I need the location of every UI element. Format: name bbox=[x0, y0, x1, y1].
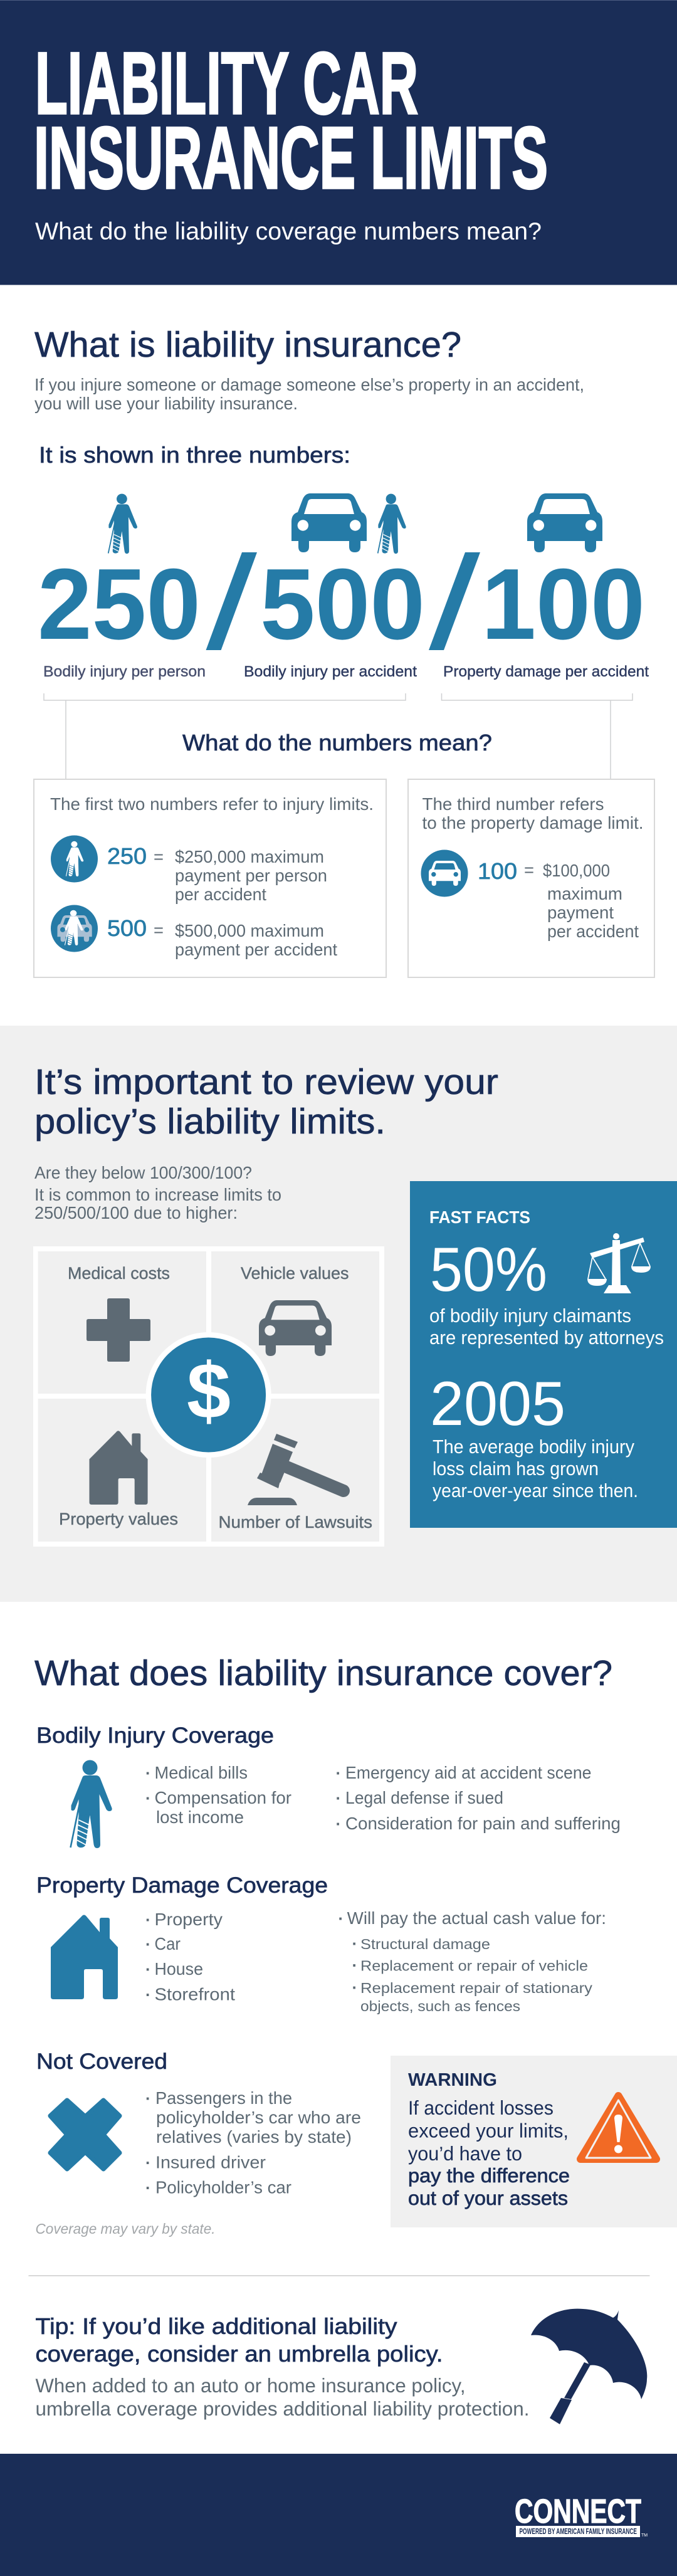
heading: review limits: policy’s liability limits. bbox=[34, 1101, 386, 1142]
list: property types: · bbox=[145, 1935, 151, 1953]
big numbers 250/500/100: 500 bbox=[260, 548, 425, 661]
stat 50% description: are represented by attorneys bbox=[429, 1327, 664, 1348]
panel: injury limits: The first two numbers refer to injury limits. bbox=[50, 794, 374, 814]
icon: person and car in circle bbox=[51, 905, 98, 952]
panel: property damage limit: to the property damage limit. bbox=[422, 813, 643, 833]
list: actual cash value: · bbox=[352, 1956, 357, 1975]
icon: X mark bbox=[50, 2100, 120, 2169]
100 explanation bbox=[478, 858, 639, 941]
tip text: umbrella coverage provides additional liability protection. bbox=[35, 2397, 529, 2420]
warning text: If accident losses bbox=[408, 2096, 554, 2119]
review paragraph bbox=[34, 1163, 281, 1222]
list: bodily injury right: Consideration for pain and suffering bbox=[345, 1814, 621, 1833]
icon: vehicle bbox=[259, 1300, 332, 1356]
list: bodily injury left: · bbox=[145, 1789, 151, 1807]
warning text: exceed your limits, bbox=[408, 2119, 569, 2142]
list: bodily injury right: Legal defense if sued bbox=[345, 1788, 503, 1807]
icon: medical cross bbox=[87, 1298, 150, 1362]
review paragraph: Are they below 100/300/100? bbox=[34, 1163, 252, 1182]
list: not covered: Insured driver bbox=[155, 2153, 266, 2172]
panel: cost factors grid bbox=[33, 1246, 384, 1547]
panel: review your limits bbox=[0, 1026, 677, 1602]
stat: 2005: 2005 bbox=[430, 1369, 565, 1438]
list: bodily injury right bbox=[336, 1763, 621, 1833]
100 explanation: payment bbox=[547, 903, 614, 922]
icon: scales of justice bbox=[587, 1233, 651, 1293]
warning text: out of your assets bbox=[408, 2187, 568, 2209]
label: medical costs: Medical costs bbox=[68, 1264, 170, 1283]
label: number of lawsuits: Number of Lawsuits bbox=[218, 1513, 372, 1532]
label: vehicle values: Vehicle values bbox=[241, 1264, 349, 1283]
number captions: Bodily injury per person bbox=[43, 663, 206, 680]
subheading: three numbers: It is shown in three numbers: bbox=[39, 442, 350, 468]
stat 2005 description: loss claim has grown bbox=[433, 1458, 599, 1480]
number captions: Property damage per accident bbox=[443, 663, 649, 680]
warning text: you’d have to bbox=[408, 2142, 522, 2165]
icon: gavel bbox=[248, 1434, 344, 1505]
list: actual cash value: Will pay the actual cash value for: bbox=[347, 1908, 606, 1928]
panel: fast facts bbox=[410, 1181, 677, 1528]
list: property types: · bbox=[145, 1910, 151, 1929]
list: actual cash value: · bbox=[352, 1934, 357, 1953]
icon: person in circle bbox=[51, 835, 98, 883]
250 explanation: per accident bbox=[175, 885, 266, 904]
list: property types bbox=[145, 1910, 235, 2004]
stat 2005 description bbox=[433, 1436, 638, 1501]
panel: footer bbox=[0, 2454, 677, 2576]
heading: review limits: It’s important to review your bbox=[34, 1062, 498, 1102]
list: not covered: · bbox=[145, 2153, 151, 2172]
tip heading bbox=[35, 2313, 443, 2367]
250 explanation: payment per person bbox=[175, 866, 327, 885]
title: LIABILITY CAR bbox=[35, 34, 418, 132]
list: bodily injury left bbox=[145, 1763, 291, 1827]
title bbox=[34, 34, 548, 207]
stat: 50%: 50% bbox=[430, 1234, 547, 1304]
panel: what is liability insurance bbox=[34, 325, 654, 977]
intro paragraph: you will use your liability insurance. bbox=[34, 394, 298, 413]
stat 2005 description: year-over-year since then. bbox=[433, 1480, 638, 1501]
list: actual cash value: objects, such as fences bbox=[360, 1998, 520, 2014]
list: bodily injury left: Compensation for bbox=[154, 1788, 291, 1807]
list: bodily injury left: · bbox=[145, 1764, 151, 1782]
big numbers 250/500/100 bbox=[38, 548, 645, 661]
list: actual cash value: · bbox=[338, 1909, 344, 1928]
500 explanation: $500,000 maximum bbox=[175, 921, 324, 940]
panel: header banner bbox=[0, 0, 677, 285]
list: not covered: Policyholder’s car bbox=[155, 2178, 291, 2197]
list: not covered: · bbox=[145, 2178, 151, 2197]
subheading: property damage coverage: Property Damage Coverage bbox=[36, 1873, 328, 1898]
subtitle: What do the liability coverage numbers mean? bbox=[35, 218, 542, 245]
tip heading: Tip: If you’d like additional liability bbox=[35, 2313, 397, 2339]
list: actual cash value: · bbox=[352, 1978, 357, 1997]
list: bodily injury right: Emergency aid at accident scene bbox=[345, 1763, 592, 1782]
list: not covered: relatives (varies by state) bbox=[156, 2127, 352, 2147]
logo: Connect: TM bbox=[641, 2533, 648, 2538]
250 explanation: = bbox=[154, 847, 164, 866]
label: property values: Property values bbox=[59, 1510, 178, 1528]
intro paragraph bbox=[34, 375, 584, 413]
500 explanation bbox=[107, 915, 337, 959]
icon: dollar circle: $ bbox=[187, 1347, 231, 1435]
100 explanation: 100 bbox=[478, 858, 517, 884]
review paragraph: 250/500/100 due to higher: bbox=[34, 1203, 238, 1222]
panel: warning bbox=[391, 2056, 677, 2227]
250 explanation: 250 bbox=[107, 843, 147, 869]
warning heading: WARNING bbox=[408, 2070, 497, 2090]
100 explanation: maximum bbox=[547, 884, 622, 903]
icon: house bbox=[51, 1915, 118, 1999]
100 explanation: per accident bbox=[547, 922, 639, 941]
heading: coverage: What does liability insurance cover? bbox=[34, 1653, 612, 1693]
500 explanation: payment per accident bbox=[175, 940, 337, 959]
panel: what does liability insurance cover bbox=[34, 1653, 677, 2237]
icon: umbrella bbox=[531, 2309, 647, 2424]
list: actual cash value: Replacement or repair of vehicle bbox=[360, 1957, 588, 1974]
warning text: pay the difference bbox=[408, 2164, 570, 2187]
list: actual cash value: Replacement repair of stationary bbox=[360, 1980, 592, 1996]
heading: what do the numbers mean: What do the numbers mean? bbox=[182, 730, 492, 755]
list: not covered: · bbox=[145, 2089, 151, 2108]
panel: umbrella tip bbox=[35, 2309, 647, 2424]
100 explanation: $100,000 bbox=[543, 861, 610, 880]
list: bodily injury left: lost income bbox=[156, 1807, 244, 1827]
500 explanation: = bbox=[154, 920, 164, 940]
review paragraph: It is common to increase limits to bbox=[34, 1185, 281, 1204]
number captions: Bodily injury per accident bbox=[244, 663, 417, 680]
icon: warning triangle bbox=[580, 2096, 656, 2159]
number captions bbox=[43, 663, 649, 680]
icon: dollar circle bbox=[146, 1332, 271, 1458]
panel: injury limits bbox=[34, 779, 386, 977]
list: property types: House bbox=[154, 1959, 203, 1979]
tip heading: coverage, consider an umbrella policy. bbox=[35, 2341, 443, 2367]
250 explanation bbox=[107, 843, 327, 904]
logo: Connect: CONNECT bbox=[515, 2493, 641, 2530]
footnote: Coverage may vary by state. bbox=[35, 2221, 216, 2237]
list: not covered bbox=[145, 2088, 361, 2197]
subheading: not covered: Not Covered bbox=[36, 2049, 167, 2074]
list: not covered: policyholder’s car who are bbox=[156, 2108, 361, 2127]
panel: property damage limit bbox=[408, 779, 654, 977]
list: bodily injury right: · bbox=[336, 1789, 341, 1807]
250 explanation: $250,000 maximum bbox=[175, 847, 324, 866]
panel: property damage limit: The third number refers bbox=[422, 794, 604, 814]
subheading: bodily injury coverage: Bodily Injury Coverage bbox=[36, 1723, 274, 1748]
warning text bbox=[408, 2096, 570, 2209]
list: property types: Car bbox=[154, 1934, 181, 1953]
icon: car bbox=[527, 493, 602, 552]
list: not covered: Passengers in the bbox=[155, 2088, 292, 2108]
icon: house bbox=[89, 1431, 148, 1505]
icon: car in circle bbox=[421, 850, 468, 896]
list: property types: · bbox=[145, 1985, 151, 2004]
icon: injured person bbox=[70, 1760, 112, 1848]
intro paragraph: If you injure someone or damage someone else’s property in an accident, bbox=[34, 375, 584, 394]
heading: what is liability insurance: What is liability insurance? bbox=[34, 325, 461, 365]
big numbers 250/500/100: 100 bbox=[481, 548, 645, 661]
stat 50% description bbox=[429, 1305, 664, 1348]
list: bodily injury right: · bbox=[336, 1814, 341, 1833]
tip text: When added to an auto or home insurance policy, bbox=[35, 2374, 465, 2397]
big numbers 250/500/100: 250 bbox=[38, 548, 201, 661]
500 explanation: 500 bbox=[107, 915, 147, 941]
list: actual cash value bbox=[338, 1908, 606, 2014]
list: bodily injury right: · bbox=[336, 1764, 341, 1782]
list: bodily injury left: Medical bills bbox=[154, 1763, 248, 1782]
icon: car and injured person bbox=[291, 493, 406, 554]
tip text bbox=[35, 2374, 529, 2420]
fast facts heading: FAST FACTS bbox=[429, 1207, 530, 1227]
icon: injured person bbox=[108, 494, 137, 554]
list: property types: · bbox=[145, 1960, 151, 1979]
list: property types: Storefront bbox=[154, 1985, 235, 2004]
heading: review limits bbox=[34, 1062, 498, 1142]
list: actual cash value: Structural damage bbox=[360, 1936, 490, 1952]
100 explanation: = bbox=[524, 860, 534, 880]
stat 50% description: of bodily injury claimants bbox=[429, 1305, 631, 1327]
stat 2005 description: The average bodily injury bbox=[433, 1436, 635, 1458]
list: property types: Property bbox=[154, 1910, 223, 1929]
